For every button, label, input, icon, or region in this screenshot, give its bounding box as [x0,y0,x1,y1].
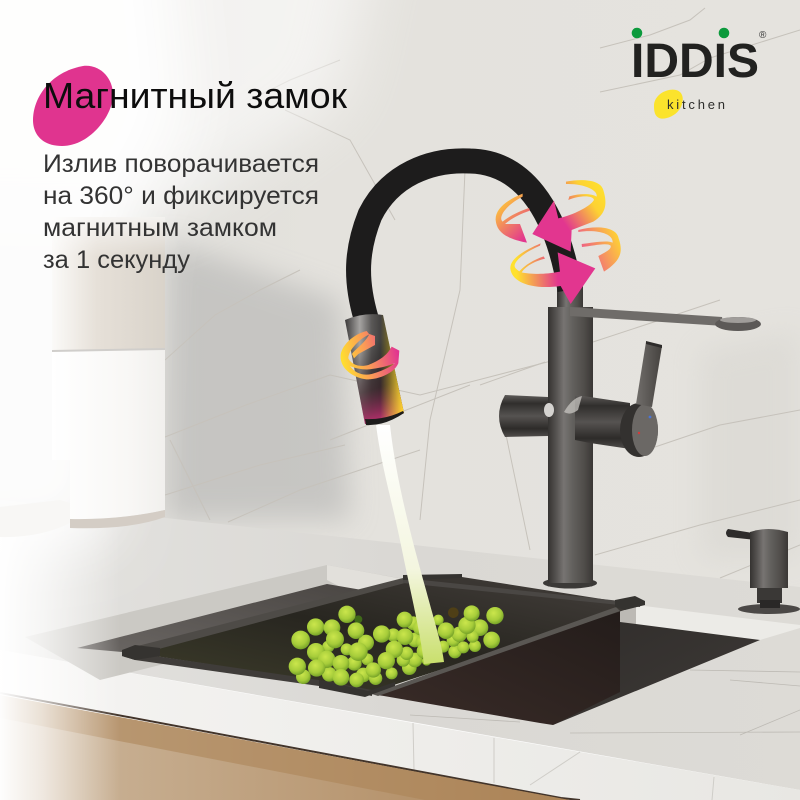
counter top [0,500,800,790]
tray corner handles [122,574,645,697]
description text [43,150,319,274]
lever end cap [620,403,658,457]
logo green dots [632,28,729,38]
left white fade upper [0,0,190,560]
arrow: upper ribbon pointing left [532,180,605,252]
wide soft fade top left [0,0,380,230]
left white fade lower [0,520,120,800]
arrow: small spout ribbon tail [352,334,375,358]
grapes [289,605,504,687]
title: Магнитный замок [43,75,347,116]
cold-water arm [499,395,548,437]
registered mark: ® [759,30,767,41]
filter spout [570,307,724,326]
left compartment [77,584,362,652]
kitchen label: kitchen [667,97,725,112]
pink blob behind title [33,66,113,146]
yellow blob [654,90,683,119]
rotation arrows on spout [341,180,621,379]
lever handle [636,342,662,407]
background cylinder appliance [0,217,165,537]
sink tray [122,574,645,697]
faucet column [548,307,593,583]
faucet neck [557,280,583,310]
counter front edge [0,650,800,800]
sink right interior [553,622,760,725]
description line 4: за 1 секунду [43,246,190,274]
IDDIS kitchen logo [631,28,767,119]
hot-water arm [575,395,630,449]
description line 2: на 360° и фиксируется [43,182,319,210]
sink right back wall [620,603,800,640]
sink cut-out left wall [25,565,420,680]
faucet [499,280,761,588]
arrow: lower ribbon pointing right [510,243,595,304]
marble wall [0,0,800,600]
water stream [376,425,444,664]
sink [25,565,800,725]
arm highlights [544,403,554,417]
counter veins [410,670,800,735]
arrow: left ribbon [496,194,530,243]
description line 3: магнитным замком [43,214,277,242]
arrow: right ribbon [578,227,621,272]
wood cabinet [0,695,575,800]
logo wordmark: IDDIS [631,35,759,88]
faucet base [543,578,597,588]
description line 1: Излив поворачивается [43,150,319,178]
flexible black hose [359,161,570,318]
soap dispenser [726,529,800,614]
arrow: small spout ribbon [341,331,399,379]
magnetic spout head [345,314,404,425]
